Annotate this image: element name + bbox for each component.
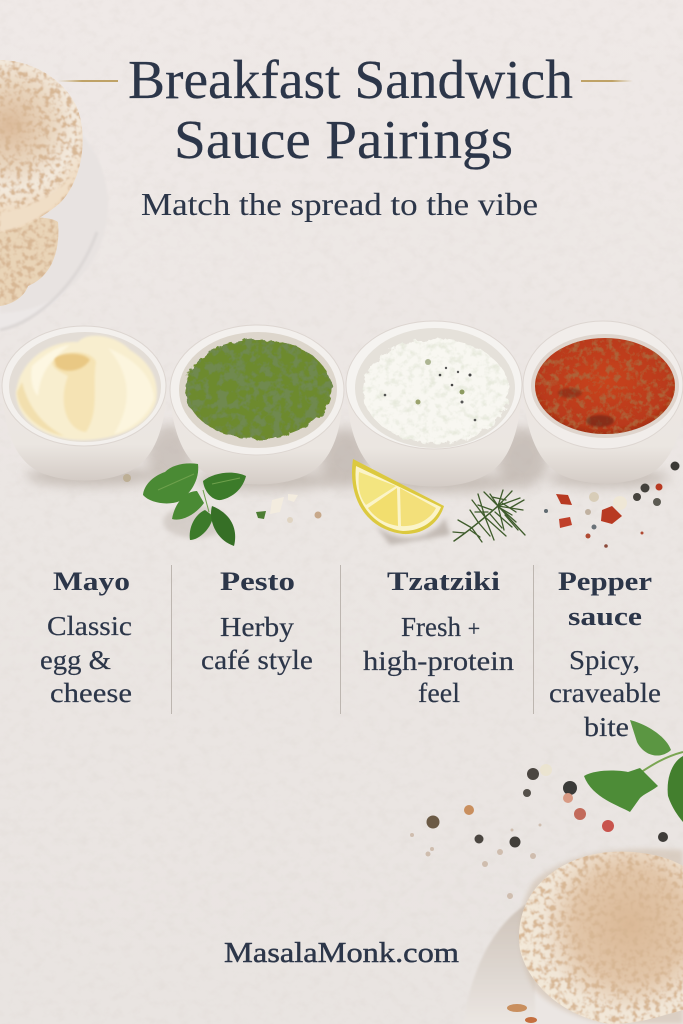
title: Sauce Pairings <box>174 109 513 170</box>
bowl: pepper sauce <box>523 321 683 487</box>
bowl: mayo <box>2 326 167 486</box>
lemon wedge <box>352 459 450 545</box>
title rule left <box>58 80 118 82</box>
column: mayo <box>40 567 132 708</box>
column: pesto: Pesto <box>220 567 295 596</box>
mayo sauce <box>16 336 157 440</box>
bowl: pesto <box>170 325 344 490</box>
column: tzatziki <box>363 567 515 708</box>
red pepper sauce <box>535 338 675 434</box>
column: tzatziki: high-protein <box>363 646 515 676</box>
column: pepper sauce: Spicy, <box>569 645 640 675</box>
dill sprig <box>453 490 525 542</box>
column: pepper sauce <box>549 567 661 742</box>
title rule right <box>581 80 633 82</box>
plate with stacked muffins, top left <box>0 60 108 330</box>
divider 3 <box>533 565 534 714</box>
plate with muffin, bottom right <box>463 849 683 1024</box>
divider 2 <box>340 565 341 714</box>
column: mayo: egg & <box>40 645 111 675</box>
tzatziki sauce <box>363 339 509 443</box>
column: mayo: Classic <box>47 611 132 641</box>
bowl: tzatziki <box>346 321 522 492</box>
column: pesto <box>201 567 313 675</box>
column: tzatziki: feel <box>418 678 460 708</box>
column: pepper sauce: sauce <box>568 602 642 631</box>
column: pepper sauce: bite <box>584 712 629 742</box>
subtitle: Match the spread to the vibe <box>141 186 538 222</box>
basil sprig, lower right <box>584 720 683 822</box>
column: mayo: cheese <box>50 678 132 708</box>
column: mayo: Mayo <box>53 567 130 596</box>
column: pepper sauce: Pepper <box>558 567 652 596</box>
pesto sauce <box>185 339 331 439</box>
title: Breakfast Sandwich <box>128 49 573 110</box>
column: pesto: Herby <box>220 612 295 642</box>
red chili flakes and peppercorns <box>544 462 680 548</box>
footer: website: MasalaMonk.com <box>224 938 459 969</box>
small crumbs and herb sprig near pesto bowl <box>123 474 322 523</box>
basil garnish <box>143 463 246 546</box>
column: pepper sauce: craveable <box>549 678 661 708</box>
title <box>128 49 573 170</box>
column: tzatziki: Fresh + <box>401 612 480 642</box>
column: tzatziki: Tzatziki <box>387 567 500 596</box>
column: pesto: café style <box>201 645 313 675</box>
scattered peppercorns and spice <box>410 764 668 899</box>
divider 1 <box>171 565 172 714</box>
